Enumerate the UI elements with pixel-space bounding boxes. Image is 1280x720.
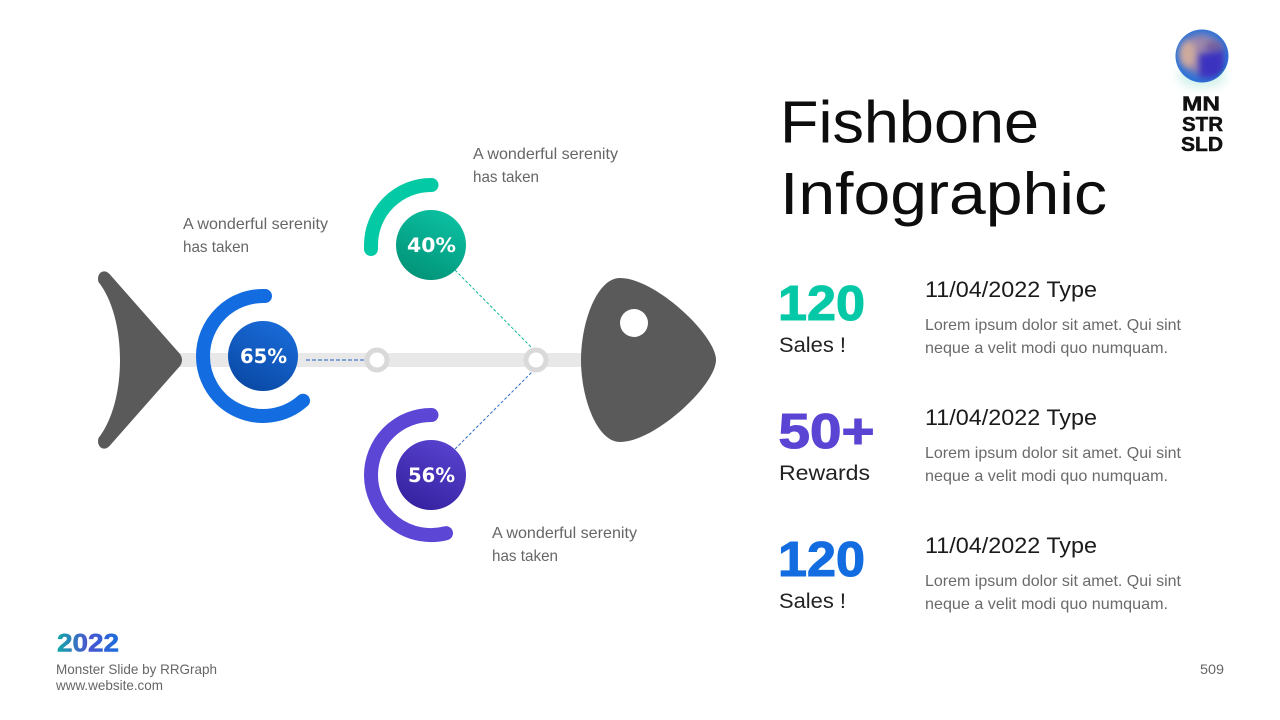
caption: 56%: has taken xyxy=(492,548,558,565)
fish head xyxy=(581,278,716,442)
ring xyxy=(371,185,432,249)
stat description xyxy=(925,445,1182,485)
value: 65% xyxy=(240,345,287,368)
title xyxy=(780,90,1107,227)
footer credits: Monster Slide by RRGraph xyxy=(56,661,217,677)
value: 56% xyxy=(408,464,455,487)
stat number: 50+ xyxy=(778,405,874,459)
stat label: Sales ! xyxy=(779,334,846,357)
footer credits: www.website.com xyxy=(55,677,163,693)
stat row 1 xyxy=(778,277,1182,357)
caption: 40%: has taken xyxy=(473,169,539,186)
stat heading: 11/04/2022 Type xyxy=(925,405,1097,430)
spine node left xyxy=(367,350,387,370)
caption: 40%: A wonderful serenity xyxy=(473,146,618,163)
caption: 40% xyxy=(473,146,618,186)
disc xyxy=(228,321,298,391)
stat row 2 xyxy=(778,405,1182,485)
spine xyxy=(178,353,588,367)
gauge: 65% xyxy=(203,296,303,416)
stat label: Sales ! xyxy=(779,590,846,613)
disc xyxy=(396,210,466,280)
stat description: Lorem ipsum dolor sit amet. Qui sint xyxy=(925,573,1182,590)
fishbone diagram xyxy=(98,146,716,565)
stat description: neque a velit modi quo numquam. xyxy=(925,468,1168,485)
stat number: 120 xyxy=(778,277,865,331)
stat number: 120 xyxy=(778,533,865,587)
value: 40% xyxy=(407,234,456,257)
spine node right xyxy=(526,350,546,370)
fish eye xyxy=(620,309,648,337)
footer credits xyxy=(55,661,217,693)
footer year: 2022 xyxy=(57,630,119,658)
icon: gradient sphere xyxy=(1176,30,1231,88)
caption: 65%: A wonderful serenity xyxy=(183,216,328,233)
stat description xyxy=(925,573,1182,613)
stat row 3 xyxy=(778,533,1182,613)
wordmark: STR xyxy=(1182,114,1224,136)
disc xyxy=(396,440,466,510)
gauge: 40% xyxy=(371,185,466,280)
page number: 509 xyxy=(1200,661,1224,677)
title: Fishbone xyxy=(780,90,1039,156)
caption: 56%: A wonderful serenity xyxy=(492,525,637,542)
title: Infographic xyxy=(780,161,1107,227)
wordmark: MN xyxy=(1182,94,1220,116)
wordmark: SLD xyxy=(1181,134,1223,156)
stat description: Lorem ipsum dolor sit amet. Qui sint xyxy=(925,317,1182,334)
connector: 56% xyxy=(455,372,532,449)
caption: 56% xyxy=(492,525,637,565)
caption: 65%: has taken xyxy=(183,239,249,256)
gauge: 56% xyxy=(371,415,466,535)
caption: 65% xyxy=(183,216,328,256)
stat heading: 11/04/2022 Type xyxy=(925,277,1097,302)
stat heading: 11/04/2022 Type xyxy=(925,533,1097,558)
wordmark xyxy=(1181,94,1224,156)
connector: 65% xyxy=(306,359,366,361)
stat description: neque a velit modi quo numquam. xyxy=(925,340,1168,357)
stat description xyxy=(925,317,1182,357)
stat label: Rewards xyxy=(779,462,870,485)
stat description: Lorem ipsum dolor sit amet. Qui sint xyxy=(925,445,1182,462)
ring xyxy=(371,415,446,535)
stat description: neque a velit modi quo numquam. xyxy=(925,596,1168,613)
fish tail xyxy=(98,271,182,449)
ring xyxy=(203,296,303,416)
connector: 40% xyxy=(455,270,532,348)
logo xyxy=(1176,30,1231,156)
